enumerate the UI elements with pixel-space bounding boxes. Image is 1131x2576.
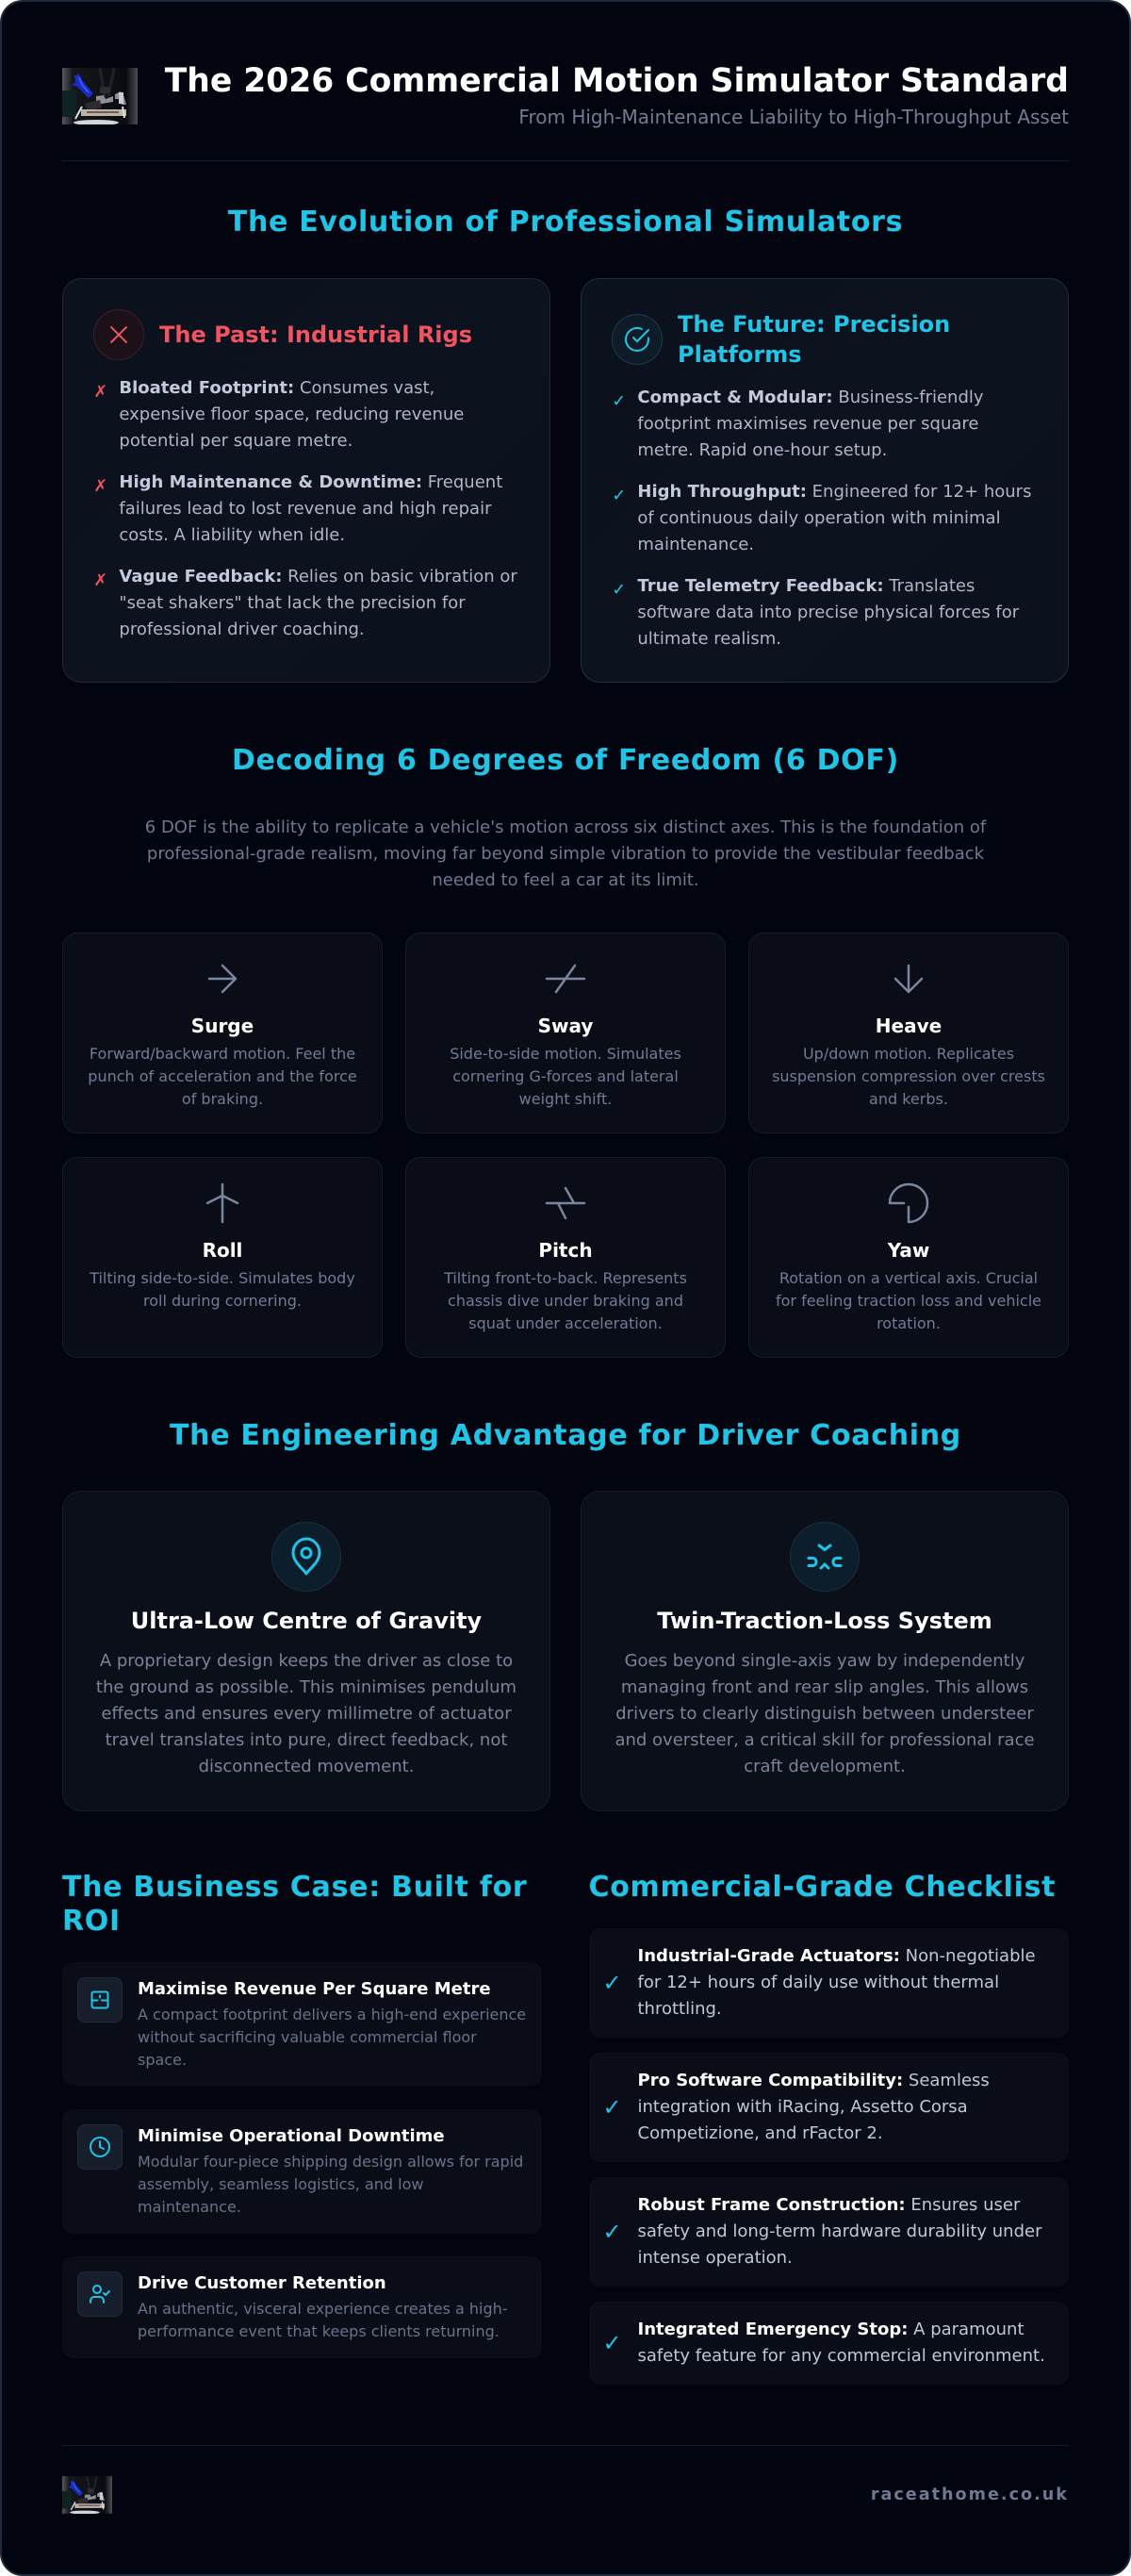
past item 2: costs. A liability when idle. <box>119 524 345 545</box>
icon: check circle <box>612 314 663 365</box>
card: roll: roll during cornering. <box>143 1292 302 1309</box>
icon: clock <box>77 2124 123 2170</box>
past item 1: expensive floor space, reducing revenue <box>119 404 464 424</box>
check item: emergency stop: safety feature for any commercial environment. <box>637 2346 1045 2365</box>
panel: twin traction loss: Goes beyond single-axis yaw by independently <box>625 1650 1024 1671</box>
check item: actuators <box>588 1928 1069 2038</box>
card: pitch: Pitch <box>538 1239 593 1262</box>
check item: software: Competizione, and rFactor 2. <box>637 2123 883 2142</box>
future item 2 <box>612 481 1031 554</box>
check item: actuators: Industrial-Grade Actuators: Non-negotiable <box>637 1946 1036 1965</box>
past item 3: professional driver coaching. <box>119 619 365 639</box>
6 DOF intro text: 6 DOF is the ability to replicate a vehicle's motion across six distinct axes. This is the foundation of <box>145 817 986 837</box>
card: maximise revenue <box>62 1962 542 2086</box>
panel: the past <box>62 278 550 683</box>
panel: the past: ✗ <box>93 571 107 590</box>
panel: twin traction loss: and oversteer, a critical skill for professional race <box>615 1729 1035 1750</box>
panel: the future <box>581 278 1069 683</box>
card: roll <box>62 1157 383 1358</box>
title: The 2026 Commercial Motion Simulator Standard <box>165 62 1069 100</box>
heading: evolution: The Evolution of Professional Simulators <box>228 206 903 238</box>
check item: frame: ✓ <box>603 2219 622 2245</box>
future heading: The Future: Precision <box>678 311 950 338</box>
heading: checklist: Commercial-Grade Checklist <box>588 1871 1056 1904</box>
icon: twin traction <box>790 1522 860 1592</box>
past item 2: failures lead to lost revenue and high repair <box>119 498 491 519</box>
heading: engineering advantage: The Engineering Advantage for Driver Coaching <box>170 1418 961 1452</box>
panel: low centre of gravity: the ground as possible. This minimises pendulum <box>96 1676 516 1697</box>
panel: low centre of gravity: Ultra-Low Centre of Gravity <box>131 1608 482 1634</box>
card: sway: Sway <box>538 1015 593 1037</box>
icon: surge arrow <box>207 964 238 994</box>
panel: twin traction loss: craft development. <box>744 1756 906 1776</box>
icon: floor box <box>77 1977 123 2023</box>
past item 2 <box>93 471 502 545</box>
card: roll: Roll <box>203 1239 242 1262</box>
future heading: Platforms <box>678 341 802 368</box>
panel: low centre of gravity <box>62 1491 550 1811</box>
6 DOF intro text <box>145 817 987 890</box>
card: customer retention: Drive Customer Retention <box>138 2273 386 2293</box>
panel: twin traction loss: Twin-Traction-Loss System <box>657 1608 992 1634</box>
card: minimise downtime <box>62 2109 542 2234</box>
check item: frame: safety and long-term hardware durability under <box>637 2221 1042 2240</box>
past item 3: "seat shakers" that lack the precision for <box>119 592 466 613</box>
check item: software: Pro Software Compatibility: Seamless <box>637 2071 990 2089</box>
icon: sway <box>545 964 586 994</box>
card: sway <box>405 933 726 1133</box>
card: customer retention: An authentic, visceral experience creates a high- <box>138 2299 508 2318</box>
header logo image <box>62 68 138 124</box>
panel: low centre of gravity: effects and ensures every millimetre of actuator <box>101 1703 512 1724</box>
card: yaw: Yaw <box>888 1239 929 1262</box>
icon: yaw <box>888 1182 929 1224</box>
card: surge: punch of acceleration and the force <box>88 1067 357 1084</box>
card: maximise revenue: Maximise Revenue Per Square Metre <box>138 1979 491 1999</box>
subtitle: From High-Maintenance Liability to High-Throughput Asset <box>518 106 1069 128</box>
future item 3: ultimate realism. <box>637 628 781 649</box>
panel: twin traction loss: drivers to clearly distinguish between understeer <box>615 1703 1034 1724</box>
past item 2: High Maintenance & Downtime: Frequent <box>119 471 502 492</box>
card: heave: suspension compression over crests <box>772 1067 1045 1084</box>
card: pitch <box>405 1157 726 1358</box>
panel: the past: ✗ <box>93 477 107 496</box>
footer url: raceathome.co.uk <box>871 2485 1069 2504</box>
card: minimise downtime: assembly, seamless logistics, and low <box>138 2174 423 2193</box>
card: heave <box>748 933 1069 1133</box>
future item 2: of continuous daily operation with minimal <box>637 507 1001 528</box>
card: heave: Up/down motion. Replicates <box>803 1045 1014 1062</box>
check item: emergency stop <box>588 2302 1069 2385</box>
card: surge: Surge <box>191 1015 254 1037</box>
future item 3: True Telemetry Feedback: Translates <box>637 575 975 596</box>
past item 1: Bloated Footprint: Consumes vast, <box>119 377 434 398</box>
panel: low centre of gravity: A proprietary design keeps the driver as close to <box>100 1650 513 1671</box>
future item 1 <box>612 387 984 460</box>
card: yaw <box>748 1157 1069 1358</box>
card: maximise revenue: space. <box>138 2050 187 2069</box>
check item: actuators: for 12+ hours of daily use without thermal <box>637 1973 999 1991</box>
check item: emergency stop: Integrated Emergency Stop: A paramount <box>637 2320 1024 2338</box>
card: heave: Heave <box>876 1015 942 1037</box>
past item 3: Vague Feedback: Relies on basic vibration or <box>119 566 517 586</box>
icon: location pin <box>271 1522 341 1592</box>
card: pitch: squat under acceleration. <box>468 1314 663 1331</box>
card: customer retention: performance event that keeps clients returning. <box>138 2321 500 2340</box>
past item 3 <box>93 566 517 639</box>
heading: 6 DOF: Decoding 6 Degrees of Freedom (6 DOF) <box>232 743 899 777</box>
panel: twin traction loss: managing front and rear slip angles. This allows <box>621 1676 1028 1697</box>
panel: the future: ✓ <box>612 487 626 505</box>
card: maximise revenue: without sacrificing valuable commercial floor <box>138 2027 477 2046</box>
card: pitch: Tilting front-to-back. Represents <box>444 1269 687 1286</box>
card: minimise downtime: Modular four-piece shipping design allows for rapid <box>138 2152 523 2171</box>
heading: business case: The Business Case: Built for <box>62 1871 527 1904</box>
icon: cross <box>93 309 144 360</box>
card: surge: of braking. <box>182 1090 263 1107</box>
future item 1: metre. Rapid one-hour setup. <box>637 439 887 460</box>
card: yaw: for feeling traction loss and vehicle <box>776 1292 1041 1309</box>
past item 1 <box>93 377 464 451</box>
card: heave: and kerbs. <box>869 1090 948 1107</box>
card: yaw: Rotation on a vertical axis. Crucial <box>779 1269 1038 1286</box>
panel: the future: ✓ <box>612 581 626 600</box>
icon: roll <box>205 1182 239 1224</box>
footer logo image <box>62 2476 112 2514</box>
check item: software: integration with iRacing, Assetto Corsa <box>637 2097 968 2116</box>
past heading: The Past: Industrial Rigs <box>159 322 472 348</box>
6 DOF intro text: professional-grade realism, moving far beyond simple vibration to provide the vestibular feedback <box>147 843 984 864</box>
card: minimise downtime: maintenance. <box>138 2197 241 2216</box>
card: sway: weight shift. <box>519 1090 612 1107</box>
check item: software <box>588 2053 1069 2162</box>
check item: actuators: ✓ <box>603 1970 622 1996</box>
check item: emergency stop: ✓ <box>603 2330 622 2356</box>
heading: business case <box>62 1871 527 1938</box>
future item 3: software data into precise physical forces for <box>637 602 1019 622</box>
card: customer retention <box>62 2256 542 2358</box>
future item 1: footprint maximises revenue per square <box>637 413 978 434</box>
icon: pitch <box>545 1186 586 1220</box>
card: pitch: chassis dive under braking and <box>448 1292 683 1309</box>
panel: the future: ✓ <box>612 392 626 411</box>
future item 1: Compact & Modular: Business-friendly <box>637 387 984 407</box>
panel: the past: ✗ <box>93 383 107 402</box>
future heading <box>678 311 950 368</box>
panel: twin traction loss <box>581 1491 1069 1811</box>
card: surge: Forward/backward motion. Feel the <box>90 1045 355 1062</box>
check item: actuators: throttling. <box>637 1999 722 2018</box>
check item: frame <box>588 2177 1069 2287</box>
future item 2: High Throughput: Engineered for 12+ hours <box>637 481 1031 502</box>
icon: user check <box>77 2271 123 2317</box>
panel: low centre of gravity: travel translates into pure, direct feedback, not <box>106 1729 507 1750</box>
card: maximise revenue: A compact footprint delivers a high-end experience <box>138 2005 526 2023</box>
card: roll: Tilting side-to-side. Simulates body <box>90 1269 355 1286</box>
panel: low centre of gravity: disconnected movement. <box>199 1756 414 1776</box>
card: sway: cornering G-forces and lateral <box>452 1067 679 1084</box>
past item 1: potential per square metre. <box>119 430 352 451</box>
future item 2: maintenance. <box>637 534 754 554</box>
icon: heave arrow <box>893 964 924 994</box>
heading: business case: ROI <box>62 1905 121 1938</box>
card: surge <box>62 933 383 1133</box>
6 DOF intro text: needed to feel a car at its limit. <box>432 869 699 890</box>
future item 3 <box>612 575 1020 649</box>
check item: frame: intense operation. <box>637 2248 793 2267</box>
card: yaw: rotation. <box>877 1314 941 1331</box>
check item: frame: Robust Frame Construction: Ensures user <box>637 2195 1020 2214</box>
card: sway: Side-to-side motion. Simulates <box>450 1045 681 1062</box>
check item: software: ✓ <box>603 2094 622 2121</box>
card: minimise downtime: Minimise Operational Downtime <box>138 2126 445 2146</box>
